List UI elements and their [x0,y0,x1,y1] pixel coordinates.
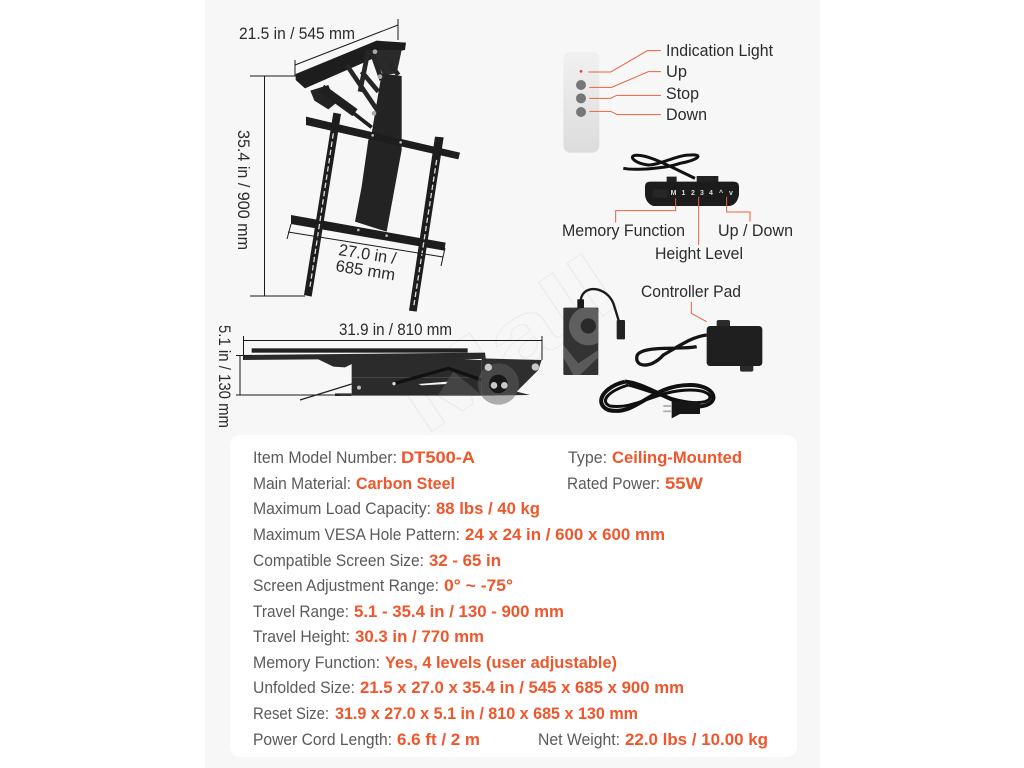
illustration: folded mount with dimensions [215,321,542,428]
folded mount drawing [243,348,542,405]
spec: reset size: Reset Size: [253,705,329,723]
spec: travel height: Travel Height: [253,628,350,646]
spec: memory [253,654,617,672]
dimension: folded height: 5.1 in / 130 mm [215,325,233,428]
wired keypad with callouts [562,155,793,263]
keypad button glyphs [671,189,733,197]
spec: screen size: 32 - 65 in [429,552,501,570]
dimension: plate width: 21.5 in / 545 mm [239,25,355,43]
dimension: bracket width metric: 685 mm [334,257,396,284]
mount drawing [291,41,460,312]
spec: load capacity: 88 lbs / 40 kg [436,500,540,518]
spec: material and power: 55W [665,475,703,493]
label: up down: Up / Down [718,222,793,240]
spec: adjustment range: 0° ~ -75° [444,577,513,595]
label: controller pad: Controller Pad [641,283,741,301]
spec: vesa: 24 x 24 in / 600 x 600 mm [465,526,665,544]
card background [230,435,797,757]
dimension: height: 35.4 in / 900 mm [234,130,252,250]
spec: travel range: 5.1 - 35.4 in / 130 - 900 mm [354,603,564,621]
spec: screen size: Compatible Screen Size: [253,552,424,570]
spec: model and type: Type: [568,449,607,467]
spec: material and power [253,475,703,493]
spec: travel height [253,628,484,646]
label: down: Down [666,106,707,124]
spec: unfolded size: 21.5 x 27.0 x 35.4 in / 545 x 685 x 900 mm [360,679,684,697]
accessories drawing [563,289,762,418]
keypad button glyphs: 3 [700,190,704,197]
keypad button glyphs: M [671,190,677,197]
label: height level: Height Level [655,245,743,263]
keypad button glyphs: 1 [682,190,686,197]
spec: model and type: Item Model Number: [253,449,397,467]
dimension: folded length: 31.9 in / 810 mm [339,321,452,339]
illustration: extended ceiling mount with dimensions [234,19,460,312]
spec: cord and weight: 22.0 lbs / 10.00 kg [625,731,768,749]
page background panel [205,0,820,768]
keypad drawing [616,155,750,245]
dimension: bracket width: 27.0 in / [337,241,398,268]
spec: travel range [253,603,564,621]
spec: cord and weight [253,731,768,749]
label: memory function: Memory Function [562,222,685,240]
spec: travel range: Travel Range: [253,603,349,621]
spec: memory: Memory Function: [253,654,380,672]
remote drawing [563,51,661,153]
spec: material and power: Main Material: [253,475,351,493]
keypad button glyphs: v [729,190,733,197]
label: stop: Stop [666,85,699,103]
power accessories [563,283,762,418]
spec: vesa: Maximum VESA Hole Pattern: [253,526,460,544]
spec: cord and weight: 6.6 ft / 2 m [397,731,480,749]
spec: cord and weight: Net Weight: [538,731,620,749]
dimension lines [236,336,542,395]
spec: vesa [253,526,665,544]
remote control with callouts [563,42,773,153]
spec: travel height: 30.3 in / 770 mm [355,628,484,646]
keypad button glyphs: ^ [719,189,723,197]
spec: load capacity: Maximum Load Capacity: [253,500,431,518]
label: indication light: Indication Light [666,42,773,60]
spec: cord and weight: Power Cord Length: [253,731,392,749]
spec: memory: Yes, 4 levels (user adjustable) [385,654,617,672]
spec: reset size: 31.9 x 27.0 x 5.1 in / 810 x 685 x 130 mm [335,705,638,723]
spec: material and power: Rated Power: [567,475,660,493]
panel: specifications card [230,435,797,757]
spec: load capacity [253,500,540,518]
spec: model and type: Ceiling-Mounted [612,449,742,467]
keypad button glyphs: 4 [709,190,713,197]
spec: material and power: Carbon Steel [356,475,455,493]
dimension lines [250,19,445,296]
spec: adjustment range: Screen Adjustment Range: [253,577,439,595]
spec: model and type: DT500-A [401,449,475,467]
spec: unfolded size: Unfolded Size: [253,679,355,697]
keypad button glyphs: 2 [691,190,695,197]
label: up: Up [666,63,687,81]
spec: model and type [253,449,742,467]
watermark: Mall [380,235,635,452]
